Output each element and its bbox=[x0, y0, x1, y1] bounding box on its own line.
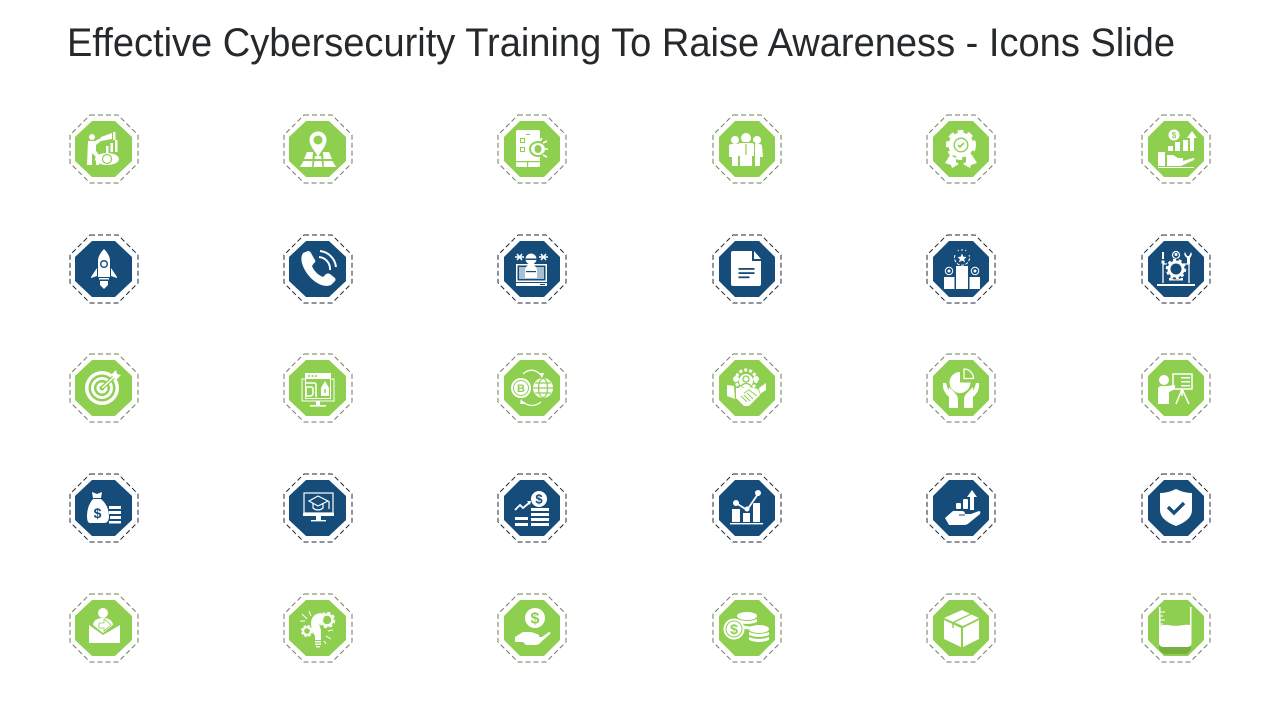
icon: target with arrow bbox=[70, 354, 138, 422]
icon: hand with growth bars and coin bbox=[1142, 115, 1210, 183]
icon: bitcoin and globe exchange: B bbox=[517, 383, 525, 395]
icon: measuring beaker bbox=[1142, 594, 1210, 662]
icon: lightbulb with gears bbox=[284, 594, 352, 662]
icon: phone with bug bbox=[498, 115, 566, 183]
icon: handshake with team gear bbox=[713, 354, 781, 422]
icon: person with envelope and arrow bbox=[70, 594, 138, 662]
icon: monitor with graduation cap bbox=[284, 474, 352, 542]
icon: coin stacks with growth line bbox=[498, 474, 566, 542]
icon: hand with growth bars and coin: $ bbox=[1172, 131, 1177, 140]
icon: monitor with web security bbox=[284, 354, 352, 422]
icon: gear on laptop with tools bbox=[1142, 235, 1210, 303]
icon: award badge with check bbox=[927, 115, 995, 183]
icon: map pin bbox=[284, 115, 352, 183]
icon: hand with bars and up arrow bbox=[927, 474, 995, 542]
icon: coin stacks with growth line: $ bbox=[535, 492, 543, 506]
icon: money bag and coins bbox=[70, 474, 138, 542]
icon: bar chart with trend line bbox=[713, 474, 781, 542]
icon: money bag and coins: $ bbox=[94, 505, 102, 521]
icon: presenter at board bbox=[1142, 354, 1210, 422]
icon: climber with telescope and eye bbox=[70, 115, 138, 183]
icon: winners podium bbox=[927, 235, 995, 303]
icon: rocket bbox=[70, 235, 138, 303]
icon: security shield bbox=[1142, 474, 1210, 542]
icon: bitcoin and globe exchange bbox=[498, 354, 566, 422]
icon: hand holding dollar coin bbox=[498, 594, 566, 662]
icon: hand holding dollar coin: $ bbox=[531, 610, 540, 628]
icon: team of people bbox=[713, 115, 781, 183]
icon: document bbox=[713, 235, 781, 303]
icon: hands holding pie chart bbox=[927, 354, 995, 422]
icon: cardboard box bbox=[927, 594, 995, 662]
title: Effective Cybersecurity Training To Raise Awareness - Icons Slide bbox=[67, 21, 1175, 65]
icon: dollar coin and coin stacks bbox=[713, 594, 781, 662]
icon: telephone bbox=[284, 235, 352, 303]
icon: dollar coin and coin stacks: $ bbox=[730, 621, 738, 637]
icon: hacker at laptop with bugs bbox=[498, 235, 566, 303]
